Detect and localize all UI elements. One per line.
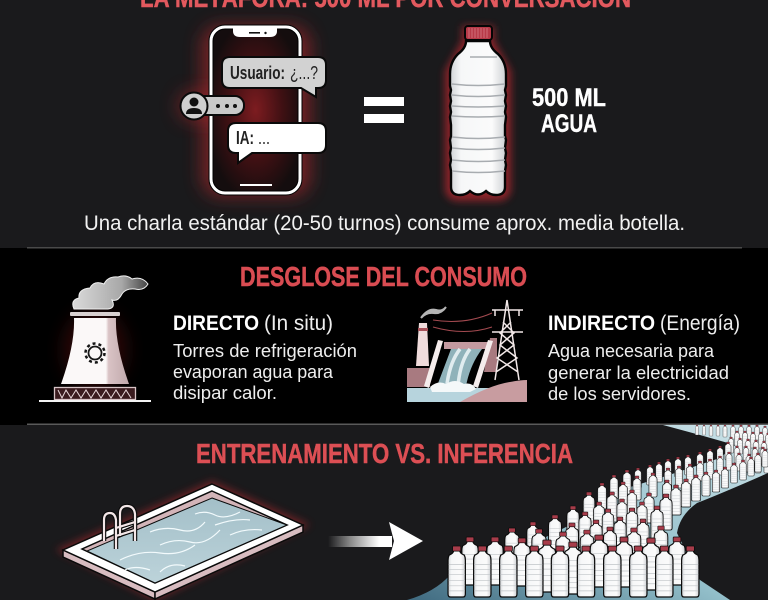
icon: equals sign xyxy=(364,97,404,123)
panel: desglose del consumo xyxy=(0,247,768,425)
text: directo: evaporan agua para xyxy=(173,361,334,382)
bottles: second row xyxy=(462,535,685,594)
bottles: sweep back rows xyxy=(635,442,768,490)
bubble: ia: IA: xyxy=(236,128,254,148)
caption: media botella: Una charla estándar (20-50 turnos) consume aprox. media botella. xyxy=(84,212,685,235)
label: 500 ml agua xyxy=(532,84,606,138)
text: directo: disipar calor. xyxy=(173,382,277,403)
icon: pool ladder xyxy=(104,506,135,549)
icon: cooling tower xyxy=(39,276,151,402)
icon: hydro dam and pylon xyxy=(407,300,527,402)
text: directo: (In situ) xyxy=(264,312,333,335)
bottles: far tail xyxy=(695,425,768,458)
text: directo: Torres de refrigeración xyxy=(173,340,357,361)
text: directo: DIRECTO xyxy=(173,312,259,335)
icon: phone with chat xyxy=(178,26,326,196)
bubble: ia: ... xyxy=(258,128,270,148)
text: indirecto: de los servidores. xyxy=(548,383,691,404)
bottles: middle cluster xyxy=(527,470,681,566)
heading: desglose del consumo: DESGLOSE DEL CONSUMO xyxy=(240,261,527,292)
text: indirecto: (Energía) xyxy=(660,312,740,335)
river of bottles xyxy=(407,425,768,600)
bubble: usuario: Usuario: xyxy=(230,63,285,83)
river xyxy=(407,425,768,600)
label: 500 ml agua: 500 ML xyxy=(532,84,606,112)
bubble: usuario: ¿...? xyxy=(290,63,318,83)
icon: water bottle xyxy=(449,26,507,197)
text: indirecto: INDIRECTO xyxy=(548,312,655,335)
bottles: front row xyxy=(448,546,699,597)
bottles: sweep front row xyxy=(681,449,768,507)
icon: swimming pool xyxy=(63,484,303,599)
label: 500 ml agua: AGUA xyxy=(541,110,597,138)
text: directo xyxy=(173,312,357,403)
bottles: third row xyxy=(505,528,641,574)
text: indirecto: Agua necesaria para xyxy=(548,340,715,361)
text: indirecto: generar la electricidad xyxy=(548,362,729,383)
arrow xyxy=(328,522,423,560)
bubble: usuario xyxy=(222,57,326,97)
text: indirecto xyxy=(548,312,740,404)
heading: entrenamiento vs. inferencia: ENTRENAMIENTO VS. INFERENCIA xyxy=(196,438,573,469)
icon: avatar xyxy=(180,92,244,120)
bubble: ia xyxy=(228,123,326,163)
